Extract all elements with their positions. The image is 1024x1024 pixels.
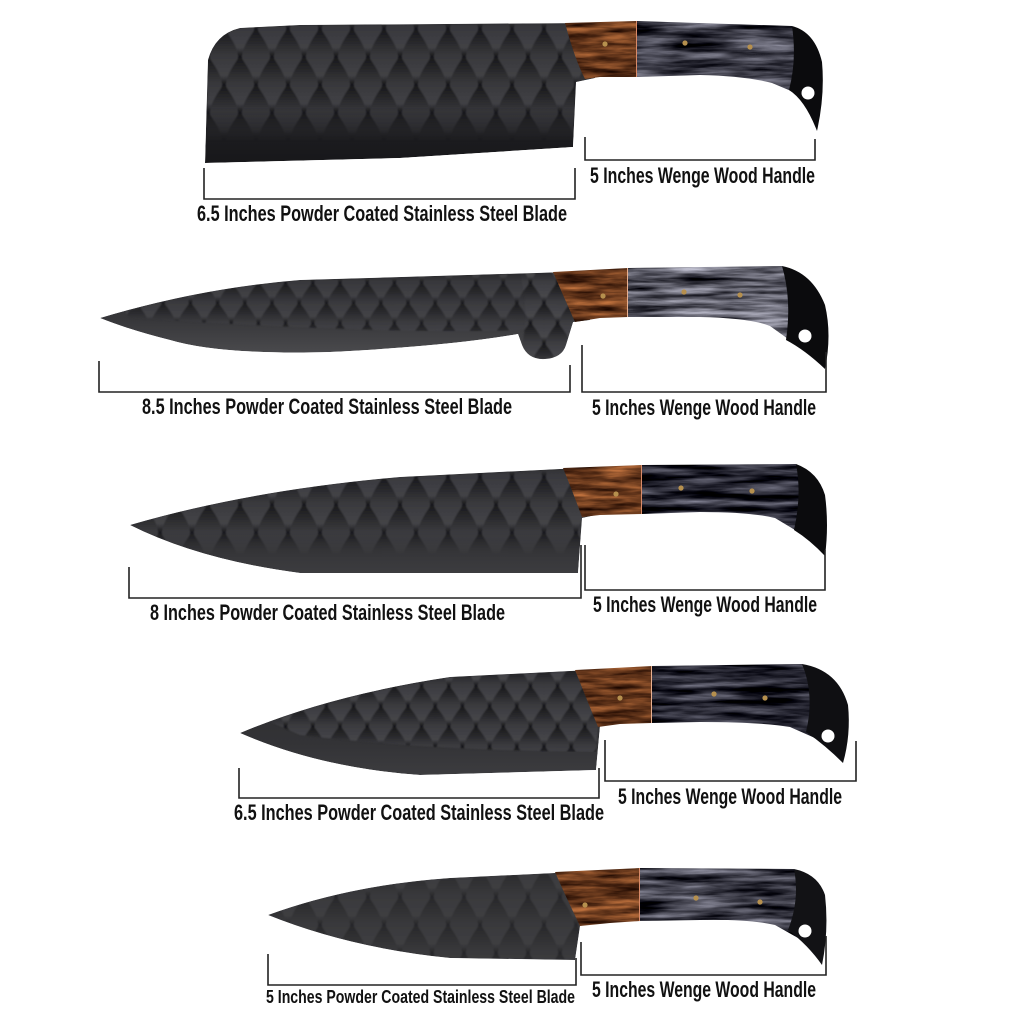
cleaver pommel [789, 26, 823, 131]
knife 3 pommel [794, 464, 827, 556]
knife 4: utility knife [240, 660, 849, 775]
bracket: knife 2 handle [582, 345, 826, 392]
knife 5: small chef knife [268, 862, 826, 965]
knife 3: chef knife [130, 460, 827, 573]
knife 2 bolster [553, 268, 628, 322]
knife 4 blade [240, 670, 615, 775]
knife 5 blade [268, 872, 598, 960]
knife 3 wenge handle [642, 464, 799, 530]
knife 3 bolster [563, 465, 641, 517]
cleaver blade [205, 23, 595, 163]
knife 2 wenge handle [628, 266, 788, 338]
copper spacer [641, 465, 643, 514]
label: knife 2 blade: 8.5 Inches Powder Coated Stainless Steel Blade [142, 394, 512, 419]
rivets [617, 691, 768, 701]
knife 5 wenge handle [640, 868, 798, 938]
rivets [613, 485, 755, 497]
copper spacer [651, 666, 653, 723]
knife 2: chef knife with finger guard [100, 264, 828, 369]
knife 4 pommel [802, 664, 849, 763]
label: knife 3 handle: 5 Inches Wenge Wood Handle [593, 592, 817, 617]
copper spacer [627, 268, 629, 317]
bracket: knife 5 handle [581, 936, 826, 975]
rivets [602, 40, 753, 50]
lanyard hole [798, 330, 812, 342]
label: cleaver handle: 5 Inches Wenge Wood Handle [590, 163, 815, 188]
knife 1: cleaver [205, 20, 823, 163]
label: knife 4 handle: 5 Inches Wenge Wood Handle [618, 784, 842, 809]
copper spacer [636, 21, 638, 77]
bracket: knife 5 blade [268, 954, 576, 985]
rivets [600, 289, 743, 299]
lanyard hole [802, 86, 814, 100]
bracket: cleaver blade [204, 168, 575, 199]
label: knife 2 handle: 5 Inches Wenge Wood Handle [592, 395, 816, 420]
cleaver wenge handle [637, 21, 794, 91]
bracket: knife 4 handle [605, 740, 856, 781]
bracket: knife 2 blade [99, 361, 570, 392]
label: cleaver blade: 6.5 Inches Powder Coated Stainless Steel Blade [197, 201, 567, 226]
bracket: knife 3 blade [129, 545, 581, 598]
knife 5 pommel [788, 869, 826, 965]
label: knife 5 blade: 5 Inches Powder Coated Stainless Steel Blade [266, 987, 575, 1007]
label: knife 3 blade: 8 Inches Powder Coated Stainless Steel Blade [150, 600, 505, 625]
bracket: cleaver handle [585, 137, 815, 160]
knife 2 blade [100, 272, 590, 359]
label: knife 5 handle: 5 Inches Wenge Wood Handle [592, 977, 816, 1002]
lanyard hole [798, 924, 812, 938]
knife 3 blade [130, 468, 600, 573]
copper spacer [639, 868, 641, 921]
cleaver bolster [565, 21, 636, 79]
knife 4 wenge handle [652, 664, 814, 738]
knife 4 bolster [575, 666, 652, 727]
knife 2 pommel [782, 266, 828, 369]
label: knife 4 blade: 6.5 Inches Powder Coated Stainless Steel Blade [234, 800, 604, 825]
bracket: knife 4 blade [239, 768, 599, 798]
rivets [582, 895, 763, 908]
bracket: knife 3 handle [585, 545, 825, 590]
lanyard hole [822, 730, 834, 742]
knife 5 bolster [555, 868, 640, 926]
